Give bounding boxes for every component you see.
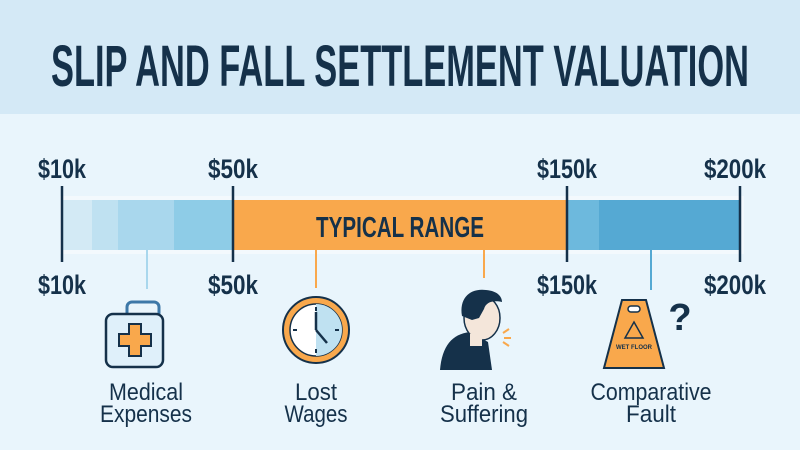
bottom scale labels: $150k — [537, 270, 598, 300]
factor labels: Fault — [626, 401, 676, 428]
top scale labels: $10k — [38, 154, 87, 184]
tick lines — [62, 186, 740, 262]
top scale labels: $50k — [208, 154, 259, 184]
icon: wet floor sign — [604, 297, 692, 368]
header band — [0, 0, 800, 114]
factor labels — [100, 379, 712, 428]
bottom scale labels: $200k — [704, 270, 767, 300]
valuation bar: TYPICAL RANGE — [316, 212, 484, 244]
icon: clock — [283, 297, 349, 363]
factor labels: Pain & — [451, 379, 517, 406]
factor labels: Suffering — [440, 401, 528, 428]
icon: medical kit — [106, 302, 163, 367]
top scale labels — [38, 154, 767, 184]
icon: wet floor sign: ? — [668, 297, 692, 339]
top scale labels: $200k — [704, 154, 767, 184]
bottom scale labels: $50k — [208, 270, 259, 300]
typical range segment — [233, 200, 567, 250]
bottom scale labels — [38, 270, 767, 300]
top scale labels: $150k — [537, 154, 598, 184]
bottom scale labels: $10k — [38, 270, 87, 300]
factor labels: Wages — [284, 401, 348, 428]
factor labels: Lost — [295, 379, 337, 406]
valuation bar — [60, 196, 744, 254]
factor connectors — [147, 250, 651, 290]
icon: person in pain — [440, 290, 511, 370]
icon: wet floor sign: WET FLOOR — [616, 345, 653, 351]
factor labels: Medical — [109, 379, 183, 406]
factor labels: Expenses — [100, 401, 192, 428]
factor labels: Comparative — [590, 379, 712, 406]
